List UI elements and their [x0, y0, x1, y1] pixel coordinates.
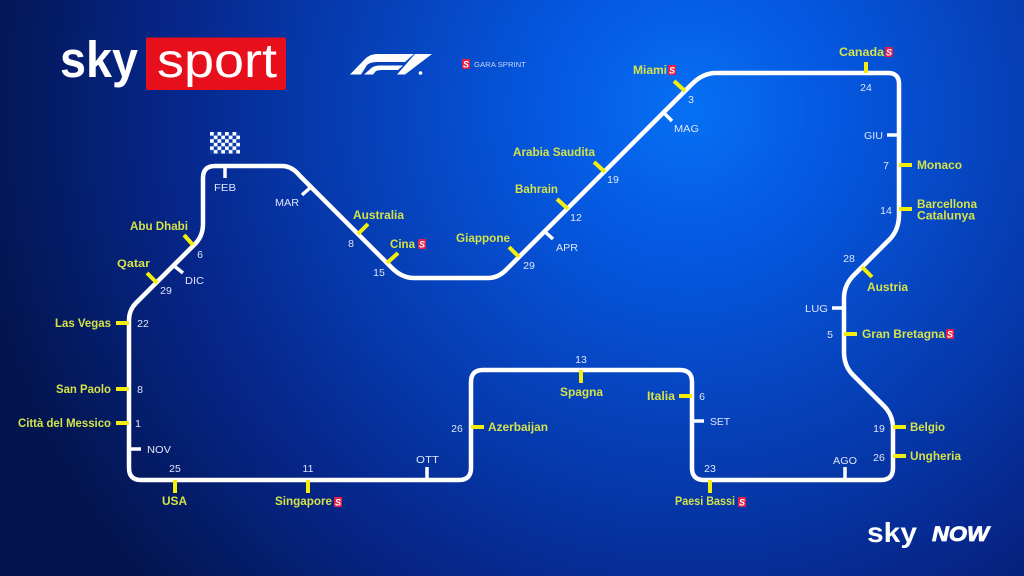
race: Giappone: 29: [523, 260, 535, 272]
logo: sky sport: sky: [60, 31, 139, 88]
month: OTT: OTT: [416, 454, 440, 466]
race: Italia: Italia: [647, 391, 676, 403]
race: Belgio: 19: [873, 423, 885, 435]
race: Abu Dhabi: [130, 221, 203, 261]
race: Canada: [839, 47, 893, 94]
race: Italia: [647, 391, 705, 403]
race: Austria: [843, 253, 909, 294]
month: MAG: [662, 111, 699, 135]
race: Canada: 24: [860, 82, 872, 94]
race: Cina: [373, 239, 426, 279]
race: Arabia Saudita: Arabia Saudita: [513, 147, 596, 159]
month: AGO: AGO: [833, 455, 857, 467]
month: AGO: [833, 455, 857, 480]
month: GIU: [864, 130, 899, 142]
month: FEB: [214, 166, 236, 194]
race: Singapore: [275, 463, 342, 508]
race: Arabia Saudita: 19: [607, 174, 619, 186]
month: APR: [543, 230, 578, 254]
icon: chequered flag: [210, 132, 240, 154]
race: Città del Messico: 1: [135, 418, 141, 430]
month: APR: APR: [556, 242, 578, 254]
race: Ungheria: Ungheria: [910, 451, 962, 463]
race: Australia: [348, 210, 405, 250]
race: San Paolo: 8: [137, 384, 143, 396]
race: Paesi Bassi: Paesi Bassi: [675, 496, 735, 508]
race: Singapore: 11: [303, 463, 314, 475]
month: MAR: [275, 187, 311, 209]
race: Monaco: [883, 160, 962, 172]
race: Barcellona Catalunya: Barcellona: [917, 199, 978, 211]
logo: sky: sky: [867, 517, 917, 548]
race: USA: 25: [169, 463, 181, 475]
race: Miami: [633, 65, 694, 106]
race: Qatar: [117, 258, 172, 297]
race: Spagna: [560, 354, 604, 399]
month: DIC: DIC: [185, 275, 204, 287]
race: Bahrain: [515, 184, 582, 224]
race: Arabia Saudita: [513, 147, 619, 186]
race: Monaco: 7: [883, 160, 889, 172]
logo: sky sport: [60, 31, 286, 90]
race: Canada: S: [886, 48, 892, 58]
race: Monaco: Monaco: [917, 160, 962, 172]
race: Austria: Austria: [867, 282, 909, 294]
race: Singapore: Singapore: [275, 496, 332, 508]
race: Ungheria: 26: [873, 452, 885, 464]
legend: gara sprint: [462, 59, 526, 70]
race: Azerbaijan: [451, 422, 548, 435]
race: San Paolo: San Paolo: [56, 384, 111, 396]
race: Paesi Bassi: S: [739, 498, 745, 508]
month: LUG: [805, 303, 844, 315]
month: MAG: MAG: [674, 123, 699, 135]
month: SET: [692, 416, 731, 428]
month: GIU: GIU: [864, 130, 883, 142]
month: SET: SET: [710, 416, 731, 428]
circuit track: [129, 73, 899, 480]
race: USA: USA: [162, 496, 187, 508]
month: LUG: LUG: [805, 303, 828, 315]
race: Bahrain: Bahrain: [515, 184, 558, 196]
race: Paesi Bassi: [675, 463, 746, 508]
month: OTT: [416, 454, 440, 480]
race: Giappone: Giappone: [456, 233, 510, 245]
race: Spagna: 13: [575, 354, 587, 366]
logo: NOW: NOW: [932, 523, 991, 546]
logo: sky sport: sport: [157, 35, 277, 88]
race: Italia: 6: [699, 391, 705, 403]
race: Abu Dhabi: 6: [197, 249, 203, 261]
race: Singapore: S: [335, 498, 341, 508]
month: FEB: FEB: [214, 182, 236, 194]
race: Cina: S: [419, 240, 425, 250]
race: Las Vegas: [55, 318, 149, 330]
race: Australia: 8: [348, 238, 354, 250]
race: Cina: Cina: [390, 239, 416, 251]
month: NOV: [129, 444, 171, 456]
race: Azerbaijan: Azerbaijan: [488, 422, 548, 434]
race: USA: [162, 463, 187, 508]
logo: F1 mark: [350, 54, 432, 75]
race: Barcellona Catalunya: 14: [880, 205, 892, 217]
month: DIC: [173, 265, 204, 287]
month: NOV: NOV: [147, 444, 171, 456]
race: Belgio: Belgio: [910, 422, 945, 434]
race: Città del Messico: Città del Messico: [18, 418, 111, 430]
race: Cina: 15: [373, 267, 385, 279]
race: Gran Bretagna: S: [947, 330, 953, 340]
race: Las Vegas: Las Vegas: [55, 318, 111, 330]
race: Miami: S: [669, 66, 675, 76]
race: Spagna: Spagna: [560, 387, 604, 399]
race: Paesi Bassi: 23: [704, 463, 716, 475]
race: Las Vegas: 22: [137, 318, 149, 330]
race: Canada: Canada: [839, 47, 885, 59]
race: Abu Dhabi: Abu Dhabi: [130, 221, 188, 233]
race: Ungheria: [873, 451, 962, 464]
race: Gran Bretagna: 5: [827, 329, 833, 341]
race: Miami: Miami: [633, 65, 667, 77]
legend: gara sprint: S: [463, 60, 469, 70]
race: Bahrain: 12: [570, 212, 582, 224]
race: Gran Bretagna: [827, 329, 954, 341]
month: MAR: MAR: [275, 197, 299, 209]
race: Australia: Australia: [353, 210, 405, 222]
race: Qatar: Qatar: [117, 258, 151, 270]
race: Giappone: [456, 233, 535, 272]
race: Qatar: 29: [160, 285, 172, 297]
race: Belgio: [873, 422, 945, 435]
race: Gran Bretagna: Gran Bretagna: [862, 329, 946, 341]
race: Azerbaijan: 26: [451, 423, 463, 435]
race: San Paolo: [56, 384, 143, 396]
race: Barcellona Catalunya: [880, 199, 978, 222]
race: Miami: 3: [688, 94, 694, 106]
legend: gara sprint: GARA SPRINT: [474, 60, 526, 69]
race: Austria: 28: [843, 253, 855, 265]
race: Barcellona Catalunya: Catalunya: [917, 210, 976, 222]
